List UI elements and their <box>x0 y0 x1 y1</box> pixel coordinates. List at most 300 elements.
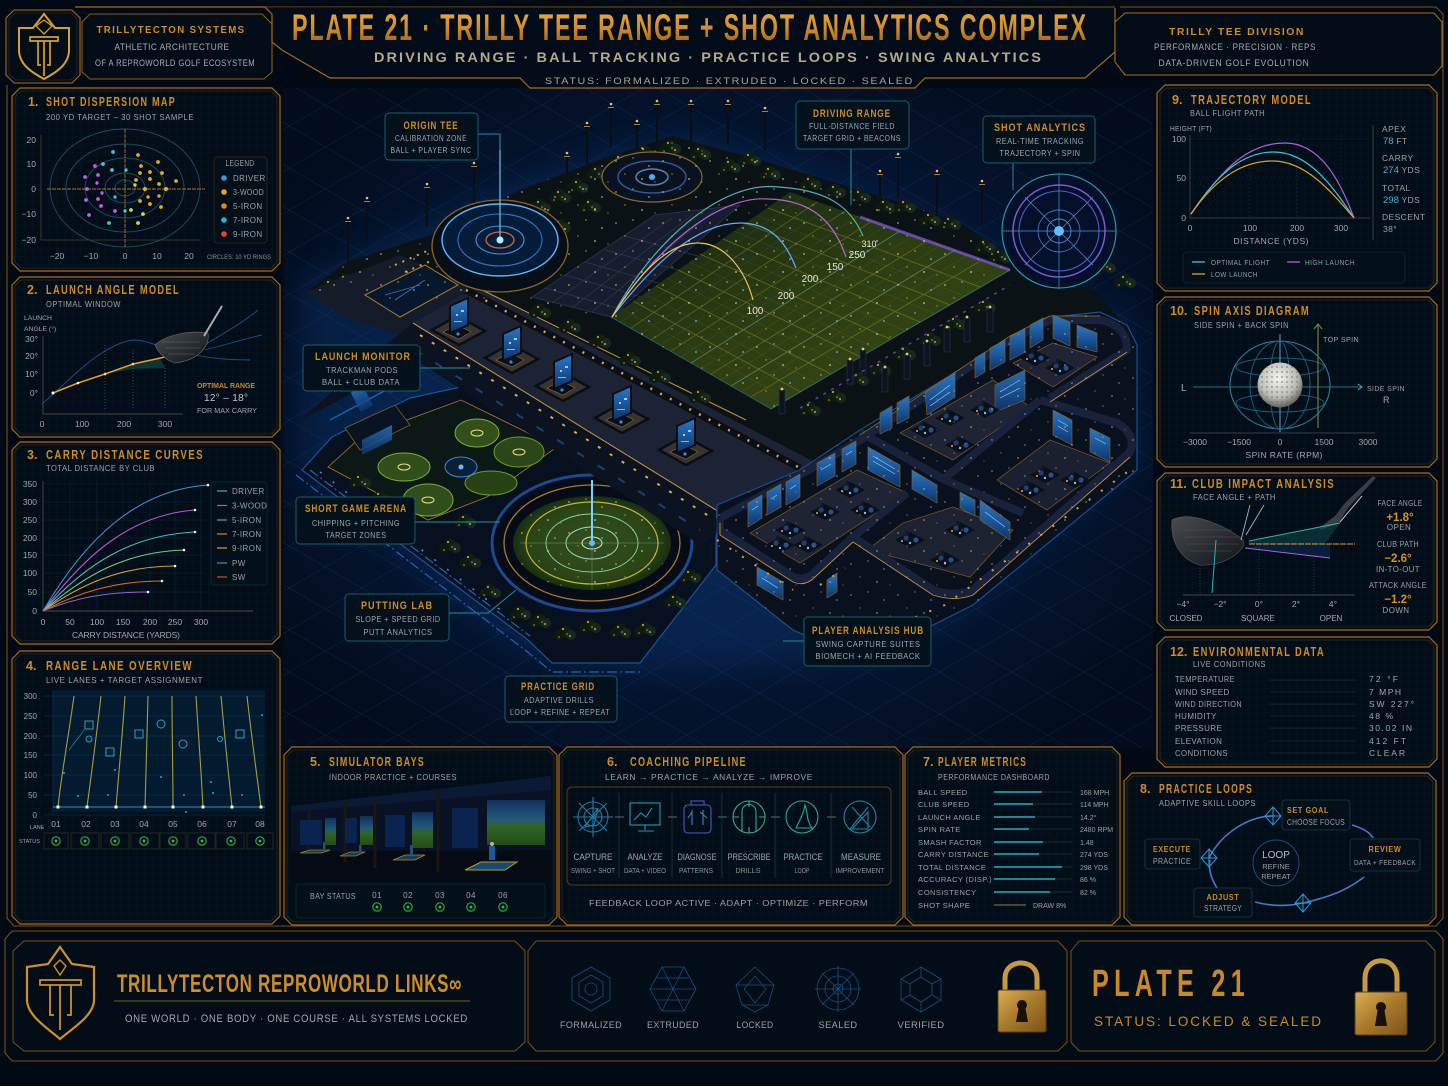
callout: optimal range: 12° – 18° <box>204 393 248 404</box>
legend: 9-IRON <box>233 230 263 239</box>
shot analytics radar <box>1002 173 1116 289</box>
curves chart: 0 <box>32 606 37 616</box>
legend: 5-IRON <box>233 202 263 211</box>
plate number: PLATE 21 <box>1092 963 1250 1005</box>
short game greens <box>378 419 544 516</box>
panel 11: club impact analysis: CLUB IMPACT ANALYSIS <box>1192 477 1335 491</box>
data rows: 72 °F <box>1369 674 1398 684</box>
bay status strip <box>296 884 545 918</box>
launch chart: 10° <box>25 369 38 379</box>
data rows: WIND DIRECTION <box>1175 700 1242 709</box>
curves chart: 100 <box>90 617 104 627</box>
metric rows: 2480 RPM <box>1080 827 1113 834</box>
dispersion chart: 0 <box>31 184 36 194</box>
bay status strip: 04 <box>466 891 476 900</box>
lane status row: 07 <box>227 819 237 829</box>
curves chart: 350 <box>23 479 37 489</box>
metric rows: SMASH FACTOR <box>918 838 982 847</box>
hub wall windows <box>717 470 1130 640</box>
icon: verified <box>901 967 941 1012</box>
panel 6: coaching pipeline: FEEDBACK LOOP ACTIVE · ADAPT · OPTIMIZE · PERFORM <box>589 898 868 908</box>
callout: short game arena <box>296 497 500 544</box>
callout: practice grid: ADAPTIVE DRILLS <box>524 695 594 705</box>
header panel: division block: DATA-DRIVEN GOLF EVOLUTION <box>1158 58 1310 68</box>
panel 8: practice loops: 8. <box>1140 782 1150 796</box>
spin axis scale: 3000 <box>1359 437 1378 447</box>
step labels: ANALYZE <box>628 852 662 863</box>
left plaza <box>306 232 500 340</box>
callout: shot analytics: TRAJECTORY + SPIN <box>1000 148 1080 158</box>
impact readouts <box>1369 499 1427 615</box>
data rows: CONDITIONS <box>1175 749 1228 758</box>
spin axis scale: 0 <box>1278 437 1283 447</box>
fairway tile strip <box>532 205 740 317</box>
spin axis scale: 1500 <box>1315 437 1334 447</box>
step labels: DRILLS <box>736 868 761 875</box>
callout: player analysis hub <box>783 617 931 666</box>
legend: PW <box>232 559 246 568</box>
step labels: MEASURE <box>841 852 881 863</box>
panel 7: player metrics: PERFORMANCE DASHBOARD <box>938 772 1050 782</box>
field edge towers and trees <box>799 402 821 416</box>
player analysis hub building <box>717 285 1137 660</box>
lounge desks <box>775 521 805 538</box>
brand tagline: ONE WORLD · ONE BODY · ONE COURSE · ALL SYSTEMS LOCKED <box>125 1013 468 1025</box>
icon: sealed <box>815 966 861 1012</box>
panel 10: spin axis diagram: L <box>1181 383 1187 394</box>
panel 9: trajectory model <box>1157 85 1437 291</box>
panel 1: shot dispersion map: 200 YD TARGET – 30 SHOT SAMPLE <box>46 112 194 122</box>
callout: putting lab: PUTTING LAB <box>361 600 433 612</box>
panel 4: range lane overview: 4. <box>26 659 36 673</box>
club face diagram: 0° <box>1255 599 1263 609</box>
panel 5: simulator bays: INDOOR PRACTICE + COURSES <box>329 772 457 782</box>
trajectory chart: 200 <box>1290 223 1304 233</box>
icon: prescribe <box>733 801 765 833</box>
lane chart <box>24 690 265 820</box>
step labels: CAPTURE <box>574 852 612 863</box>
lane status row: 04 <box>139 819 149 829</box>
panel 3: carry distance curves: TOTAL DISTANCE BY CLUB <box>46 463 155 473</box>
dispersion chart: 0 <box>123 251 128 261</box>
callout: origin tee: BALL + PLAYER SYNC <box>390 145 472 155</box>
icon: light posts along the range <box>345 100 985 261</box>
trajectory chart <box>1172 125 1373 246</box>
impact readouts: −2.6° <box>1384 553 1412 565</box>
metric rows: 86 % <box>1080 877 1096 884</box>
callout: putting lab: SLOPE + SPEED GRID <box>356 614 440 624</box>
callout: practice grid: PRACTICE GRID <box>521 681 595 693</box>
panel 5: simulator bays: SIMULATOR BAYS <box>329 755 425 769</box>
lane status row: 02 <box>81 819 91 829</box>
lane chart: 300 <box>24 692 38 701</box>
header panel: company text: OF A REPROWORLD GOLF ECOSYSTEM <box>95 58 255 69</box>
callout: launch monitor: TRACKMAN PODS <box>326 365 398 375</box>
icon: analyze <box>630 803 660 831</box>
panel 2: launch angle model: LAUNCH <box>24 315 52 322</box>
panel 1: shot dispersion map: SHOT DISPERSION MAP <box>46 95 176 109</box>
step: review: DATA + FEEDBACK <box>1354 858 1416 867</box>
callout: driving range: TARGET GRID + BEACONS <box>803 133 901 143</box>
panel 7: player metrics: PLAYER METRICS <box>938 755 1027 769</box>
step: adjust: STRATEGY <box>1204 904 1242 913</box>
step: set goal: CHOOSE FOCUS <box>1287 818 1345 827</box>
panel 3: carry distance curves: CARRY DISTANCE CURVES <box>46 448 204 462</box>
seal labels: EXTRUDED <box>647 1020 699 1030</box>
panel 4: range lane overview: LIVE LANES + TARGET ASSIGNMENT <box>46 675 203 685</box>
dispersion chart <box>22 129 205 261</box>
step labels: PRACTICE <box>784 852 822 863</box>
callout: shot analytics <box>983 116 1095 190</box>
panel 12: environmental data: 12. <box>1170 645 1187 659</box>
plate status line: STATUS: LOCKED & SEALED <box>1094 1013 1323 1029</box>
panel 11: club impact analysis: FACE ANGLE + PATH <box>1193 492 1276 502</box>
curves chart: 200 <box>143 617 157 627</box>
impact readouts: −1.2° <box>1384 594 1412 606</box>
footer panel: verification seals <box>528 941 1067 1051</box>
upper ground with tree line <box>306 136 1136 470</box>
panel 1: shot dispersion map: CIRCLES: 10 YD RINGS <box>207 255 271 261</box>
data rows: TEMPERATURE <box>1175 675 1235 684</box>
step labels: DIAGNOSE <box>678 852 716 863</box>
ball flight arcs with distance markers: 310 <box>861 239 877 249</box>
icon: gold padlock <box>998 963 1046 1032</box>
data rows <box>1175 674 1414 758</box>
callout: short game arena: SHORT GAME ARENA <box>305 503 407 515</box>
spin axis scale: −1500 <box>1227 437 1251 447</box>
launch chart: 300 <box>158 419 172 429</box>
impact readouts: ATTACK ANGLE <box>1369 581 1427 590</box>
panel 2: launch angle model <box>12 277 280 437</box>
curves chart: 300 <box>23 497 37 507</box>
data rows: PRESSURE <box>1175 724 1222 733</box>
seal labels: VERIFIED <box>898 1020 945 1030</box>
panel 10: spin axis diagram: R <box>1383 395 1390 405</box>
panel 10: spin axis diagram: TOP SPIN <box>1323 335 1359 344</box>
trajectory chart: 0 <box>1188 223 1193 233</box>
upper ring plaza <box>602 152 702 202</box>
legend: SW <box>232 573 246 582</box>
metric rows: CONSISTENCY <box>918 888 977 897</box>
callout: driving range: FULL-DISTANCE FIELD <box>809 121 895 131</box>
step: execute: PRACTICE <box>1153 857 1191 866</box>
data rows: 7 MPH <box>1369 687 1401 697</box>
metric rows: 274 YDS <box>1080 852 1108 859</box>
legend: 9-IRON <box>232 544 262 553</box>
data rows: WIND SPEED <box>1175 688 1230 697</box>
lane status row: LANE <box>30 825 45 831</box>
trajectory chart: 100 <box>1243 223 1257 233</box>
trajectory chart: 50 <box>1177 173 1186 183</box>
ball flight arcs with distance markers: 200 <box>778 291 795 302</box>
callout: shot analytics: REAL-TIME TRACKING <box>996 136 1084 146</box>
callout: shot analytics: SHOT ANALYTICS <box>994 122 1086 134</box>
footer panel: brand <box>13 941 525 1051</box>
metric rows: CLUB SPEED <box>918 800 970 809</box>
callout: putting lab <box>345 590 516 641</box>
club face diagram: SQUARE <box>1241 614 1275 623</box>
curves chart: 200 <box>23 533 37 543</box>
step: set goal: SET GOAL <box>1287 805 1329 815</box>
launch monitor bays strip <box>300 287 830 545</box>
header panel: division block: TRILLY TEE DIVISION <box>1169 26 1305 38</box>
panel 2: launch angle model: 2. <box>27 283 37 297</box>
callout: driving range: DRIVING RANGE <box>813 108 891 120</box>
step labels: PATTERNS <box>679 868 713 875</box>
panel 11: club impact analysis <box>1157 473 1437 630</box>
panel 11: club impact analysis: 11. <box>1170 477 1187 491</box>
panel 6: coaching pipeline: COACHING PIPELINE <box>630 755 747 769</box>
launch chart: 30° <box>25 334 38 344</box>
header panel: company text: TRILLYTECTON SYSTEMS <box>96 24 246 36</box>
lane status row: 08 <box>255 819 265 829</box>
status line: STATUS: FORMALIZED · EXTRUDED · LOCKED · SEALED <box>545 76 914 87</box>
lane chart: 150 <box>24 751 38 760</box>
dispersion chart: −20 <box>50 251 64 261</box>
header panel: company text <box>82 14 272 79</box>
step: execute <box>1145 839 1200 869</box>
lane status row: 01 <box>51 819 61 829</box>
panel 1: shot dispersion map: 1. <box>28 95 38 109</box>
data rows: 30.02 IN <box>1369 723 1412 733</box>
panel 8: practice loops: ADAPTIVE SKILL LOOPS <box>1159 798 1256 808</box>
launch chart: 0 <box>40 419 45 429</box>
panel 6: coaching pipeline <box>559 747 903 925</box>
launch chart: 0° <box>30 388 38 398</box>
panel 7: player metrics <box>905 747 1120 925</box>
speckled lights on upper ground <box>306 136 1012 317</box>
metric rows: SPIN RATE <box>918 825 961 834</box>
flight stats: 78 FT <box>1383 136 1408 147</box>
panel 10: spin axis diagram: 10. <box>1170 304 1187 318</box>
putting lab circular green <box>439 452 701 640</box>
bay status strip: 02 <box>403 891 413 900</box>
callout: practice grid <box>505 676 617 722</box>
trajectory chart: 300 <box>1334 223 1348 233</box>
spin axis scale: SPIN RATE (RPM) <box>1246 450 1323 460</box>
icon: extruded <box>650 967 696 1011</box>
callout: optimal range <box>197 381 257 415</box>
metric rows: SHOT SHAPE <box>918 901 970 910</box>
launch chart: 20° <box>25 351 38 361</box>
legend: HIGH LAUNCH <box>1305 260 1355 267</box>
panel 12: environmental data: LIVE CONDITIONS <box>1193 659 1266 669</box>
panel 10: spin axis diagram: SIDE SPIN <box>1367 384 1405 393</box>
seal labels: FORMALIZED <box>560 1020 622 1030</box>
dispersion chart: 10 <box>27 159 36 169</box>
panel 9: trajectory model: TRAJECTORY MODEL <box>1191 93 1312 107</box>
pipeline steps box <box>567 787 891 885</box>
icon: shield logo <box>19 14 69 79</box>
spin axis scale: −3000 <box>1183 437 1207 447</box>
lane chart: 250 <box>24 712 38 721</box>
step: execute: EXECUTE <box>1153 844 1191 854</box>
simulator bay image <box>291 776 551 882</box>
loop arrows <box>1201 807 1373 912</box>
impact readouts: IN-TO-OUT <box>1376 565 1420 574</box>
loop centre: REFINE <box>1262 862 1290 871</box>
legend: 3-WOOD <box>232 502 267 510</box>
panel 4: range lane overview: RANGE LANE OVERVIEW <box>46 659 193 673</box>
dispersion chart: −10 <box>84 251 98 261</box>
subtitle: DRIVING RANGE · BALL TRACKING · PRACTICE LOOPS · SWING ANALYTICS <box>374 49 1043 65</box>
ball flight arcs with distance markers: 250 <box>849 250 866 261</box>
lane status row: 05 <box>168 819 178 829</box>
data rows: CLEAR <box>1369 748 1405 758</box>
callout: putting lab: PUTT ANALYTICS <box>364 627 432 637</box>
origin tee ring with light beam <box>432 135 568 292</box>
step labels: LOOP <box>794 868 810 875</box>
bay status strip: 01 <box>372 891 382 900</box>
dispersion chart: 20 <box>184 251 194 261</box>
panel 10: spin axis diagram <box>1157 297 1437 467</box>
lane chart: 100 <box>24 771 38 780</box>
loop centre: REPEAT <box>1261 872 1291 881</box>
header panel: company text: ATHLETIC ARCHITECTURE <box>114 42 230 53</box>
callout: practice grid: LOOP + REFINE + REPEAT <box>510 707 610 717</box>
callout: launch monitor <box>303 345 470 391</box>
metric rows: DRAW 8% <box>1033 903 1066 910</box>
legend: 7-IRON <box>233 216 263 225</box>
seal labels <box>560 1020 945 1030</box>
icon: formalized <box>572 967 610 1011</box>
club face diagram <box>1170 476 1376 623</box>
flight stats: 274 YDS <box>1383 165 1420 176</box>
curves chart: 100 <box>23 568 37 578</box>
panel 10: spin axis diagram: SPIN AXIS DIAGRAM <box>1194 304 1310 318</box>
panel 5: simulator bays <box>284 747 557 925</box>
panel 4: range lane overview <box>12 651 280 924</box>
panel 12: environmental data: ENVIRONMENTAL DATA <box>1193 645 1325 659</box>
icon: driver head <box>155 306 222 363</box>
panel 3: carry distance curves: 3. <box>27 448 37 462</box>
launch chart: 100 <box>75 419 89 429</box>
header panel: logo block <box>6 10 80 83</box>
curves chart: 150 <box>23 550 37 560</box>
dispersion chart: −20 <box>22 235 36 245</box>
flight stats: TOTAL <box>1382 183 1411 193</box>
legend: 5-IRON <box>232 516 262 525</box>
data rows: SW 227° <box>1369 699 1414 709</box>
legend <box>1183 252 1405 283</box>
metric rows: 1.48 <box>1080 840 1094 847</box>
metric rows: ACCURACY (DISP.) <box>918 875 992 884</box>
step: adjust: ADJUST <box>1206 892 1240 902</box>
lane status row <box>19 819 273 849</box>
icon: measure <box>844 801 876 833</box>
ball flight arcs with distance markers: 150 <box>827 262 844 273</box>
icon: capture <box>573 797 613 837</box>
flight stats: APEX <box>1382 124 1406 134</box>
callout: optimal range: FOR MAX CARRY <box>197 406 257 415</box>
bay status strip: 06 <box>498 891 508 900</box>
spin axis scale <box>1183 433 1378 460</box>
icon: footer shield logo <box>27 947 94 1039</box>
curves chart: 250 <box>23 515 37 525</box>
panel 1: shot dispersion map <box>12 88 280 271</box>
club face diagram: 4° <box>1329 599 1337 609</box>
loop centre: LOOP <box>1262 850 1290 861</box>
metric rows: 14.2° <box>1080 814 1097 822</box>
header panel: division block: PERFORMANCE · PRECISION · REPS <box>1154 42 1316 52</box>
icon: locked <box>736 967 774 1012</box>
step labels: IMPROVEMENT <box>836 868 885 875</box>
panel 12: environmental data <box>1157 637 1437 767</box>
callout: origin tee: ORIGIN TEE <box>404 120 458 132</box>
impact readouts: OPEN <box>1387 523 1411 532</box>
panel 6: coaching pipeline: 6. <box>607 755 617 769</box>
lane chart: 0 <box>33 811 38 820</box>
metric rows: 168 MPH <box>1080 790 1109 797</box>
callout: origin tee: CALIBRATION ZONE <box>395 133 467 143</box>
callout: origin tee <box>385 113 500 160</box>
panel 8: practice loops <box>1124 773 1436 925</box>
callout: optimal range: OPTIMAL RANGE <box>197 381 255 390</box>
panel 2: launch angle model: ANGLE (°) <box>24 325 56 333</box>
curves chart: CARRY DISTANCE (YARDS) <box>72 630 180 640</box>
curves chart: 250 <box>168 617 182 627</box>
dispersion chart: 20 <box>27 135 36 145</box>
lane status row: STATUS <box>19 839 40 845</box>
metric rows: 82 % <box>1080 890 1096 897</box>
panel 9: trajectory model: BALL FLIGHT PATH <box>1190 108 1265 118</box>
flight stats: CARRY <box>1382 153 1414 163</box>
legend: OPTIMAL FLIGHT <box>1211 260 1270 267</box>
step: review <box>1350 839 1420 871</box>
legend <box>214 157 267 243</box>
wire sphere with ball <box>1193 324 1362 432</box>
legend: LOW LAUNCH <box>1211 272 1258 279</box>
icon: diagnose <box>684 801 711 833</box>
panel 7: player metrics: 7. <box>923 755 933 769</box>
brand name: TRILLYTECTON REPROWORLD LINKS∞ <box>117 970 462 998</box>
loop centre <box>1253 840 1299 886</box>
club face diagram: 2° <box>1292 599 1300 609</box>
club face diagram: CLOSED <box>1170 614 1203 623</box>
panel 9: trajectory model: HEIGHT (FT) <box>1170 126 1212 133</box>
flight stats: 38° <box>1383 224 1397 234</box>
panel 8: practice loops: PRACTICE LOOPS <box>1159 782 1253 796</box>
ball flight arcs with distance markers <box>612 186 877 317</box>
step: review: REVIEW <box>1368 844 1402 854</box>
callout: driving range <box>796 101 909 205</box>
legend: LEGEND <box>226 159 254 168</box>
impact readouts: DOWN <box>1383 606 1409 615</box>
ball flight arcs with distance markers: 100 <box>747 306 764 317</box>
panel 5: simulator bays: 5. <box>310 755 320 769</box>
seal labels: SEALED <box>818 1020 858 1030</box>
legend: 7-IRON <box>232 530 262 539</box>
callout: short game arena: TARGET ZONES <box>326 530 386 540</box>
legend: DRIVER <box>232 487 265 496</box>
curves chart: 50 <box>28 587 37 597</box>
panel 6: coaching pipeline: LEARN → PRACTICE → ANALYZE → IMPROVE <box>605 772 813 782</box>
central isometric campus illustration <box>283 88 1153 748</box>
dispersion chart: 10 <box>152 251 162 261</box>
callout: player analysis hub: PLAYER ANALYSIS HUB <box>812 625 924 637</box>
bay status strip: 03 <box>435 891 445 900</box>
trajectory chart: DISTANCE (YDS) <box>1234 236 1309 246</box>
metric rows: CARRY DISTANCE <box>918 850 989 859</box>
data rows: HUMIDITY <box>1175 712 1217 721</box>
data rows: 48 % <box>1369 711 1393 721</box>
metric rows: LAUNCH ANGLE <box>918 813 981 822</box>
callout: short game arena: CHIPPING + PITCHING <box>312 518 400 528</box>
seal labels: LOCKED <box>736 1020 774 1030</box>
bay status strip: BAY STATUS <box>310 892 356 901</box>
dispersion chart: −10 <box>22 209 36 219</box>
flight stats <box>1382 124 1425 234</box>
